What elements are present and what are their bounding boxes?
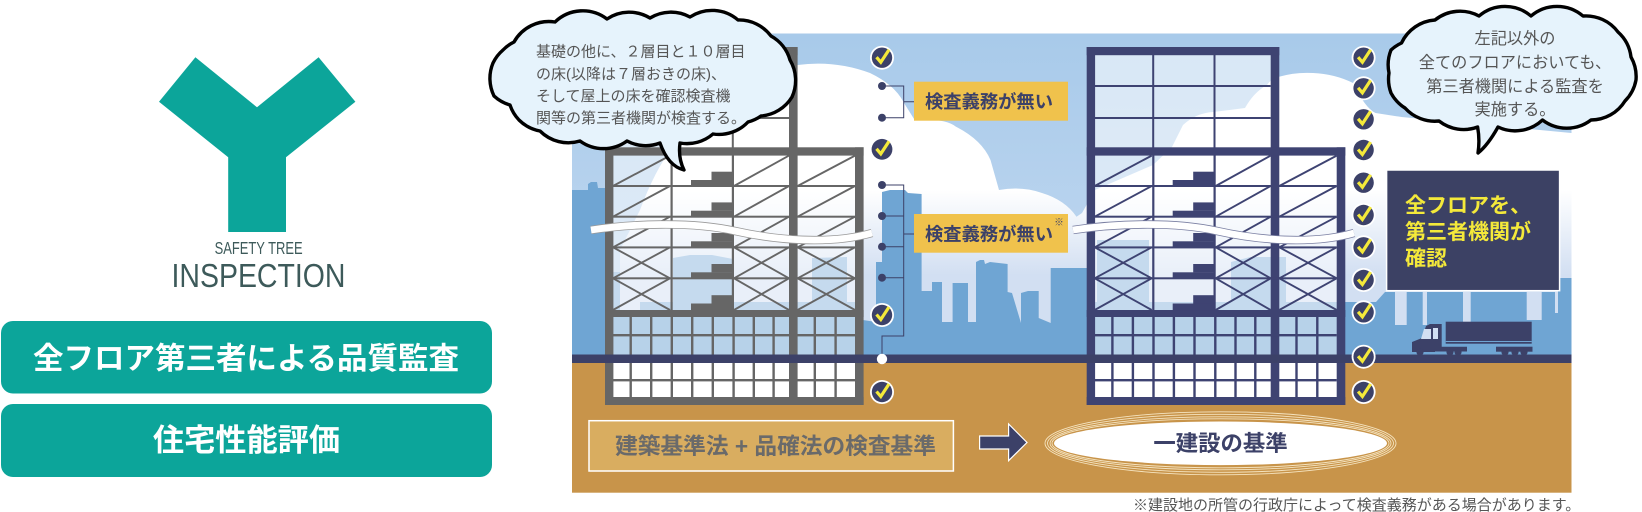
arrow (980, 424, 1027, 461)
checks: right building (1352, 46, 1376, 404)
ellipse: ichiken standard (1045, 412, 1396, 475)
label: no inspection duty, middle (914, 214, 1068, 253)
callout: all floors confirmed by third party: 第三者機関が (1405, 220, 1531, 244)
speech bubble: left: そして屋上の床を確認検査機 (536, 88, 731, 105)
connector dots (878, 82, 886, 282)
box: building code standard: 建築基準法 + 品確法の検査基準 (615, 433, 936, 459)
marker: ground level point (877, 354, 887, 364)
connector lines: no inspection duty (882, 86, 914, 359)
label: no inspection duty, middle: ※ (1054, 218, 1064, 228)
ground line (572, 354, 1572, 363)
checks: left building (870, 46, 894, 404)
speech bubble: right: 左記以外の (1475, 30, 1555, 48)
callout: all floors confirmed by third party: 全フロアを、 (1405, 194, 1531, 218)
label: no inspection duty, middle: 検査義務が無い (925, 224, 1053, 244)
speech bubble: left (490, 10, 796, 170)
building: left, minimum code inspection (605, 47, 864, 405)
callout: all floors confirmed by third party: 確認 (1405, 248, 1447, 270)
speech bubble: right: 全てのフロアにおいても、 (1419, 54, 1611, 72)
logo text: INSPECTION: INSPECTION (172, 258, 346, 295)
speech bubble: right (1388, 6, 1636, 153)
badge: full floor third-party quality audit (1, 321, 492, 394)
wavy break line: left building (591, 224, 872, 240)
ellipse: ichiken standard: 一建設の基準 (1153, 431, 1288, 456)
label: no inspection duty, upper (914, 82, 1068, 121)
wavy break line: right building (1073, 224, 1354, 240)
building: right, all floors inspected (1087, 47, 1345, 405)
label: no inspection duty, upper: 検査義務が無い (925, 91, 1053, 112)
box: building code standard (589, 421, 953, 471)
speech bubble: left: 関等の第三者機関が検査する。 (536, 109, 746, 127)
callout: all floors confirmed by third party (1387, 170, 1560, 291)
icon: truck (1412, 322, 1532, 356)
ground (572, 363, 1572, 493)
logo text: SAFETY TREE: SAFETY TREE (215, 238, 303, 258)
speech bubble: left: の床(以降は７層おきの床)、 (536, 66, 726, 83)
speech bubble: right: 第三者機関による監査を (1426, 78, 1604, 96)
badge: housing performance evaluation: 住宅性能評価 (153, 423, 340, 458)
speech bubble: left: 基礎の他に、２層目と１０層目 (536, 44, 746, 60)
badge: housing performance evaluation (1, 404, 492, 477)
speech bubble: right: 実施する。 (1475, 101, 1555, 119)
logo: safety tree Y mark (159, 57, 355, 232)
scene: sky, clouds and city background (572, 34, 1572, 356)
badge: full floor third-party quality audit: 全フロア第三者による品質監査 (33, 342, 459, 376)
